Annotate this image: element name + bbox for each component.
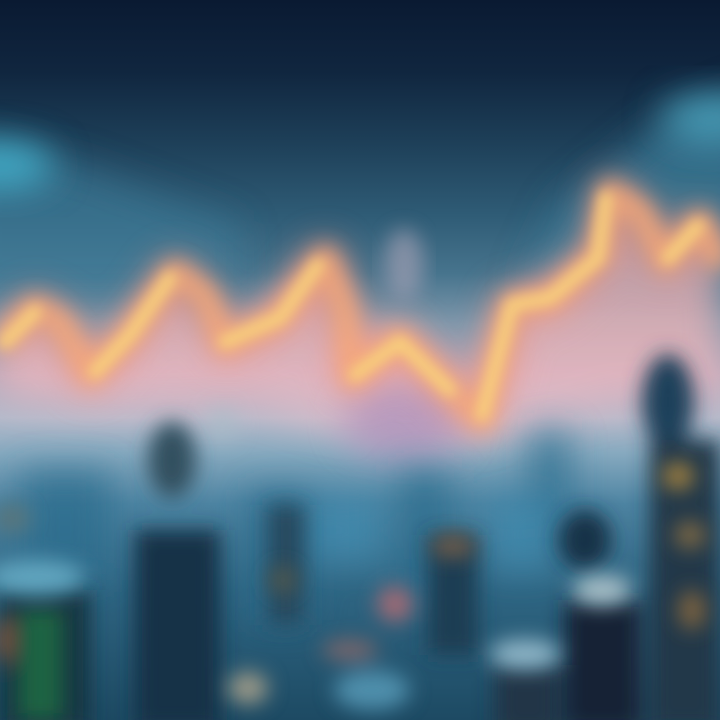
distant pale tower (384, 229, 424, 301)
market line: yellow rising segments (5, 198, 698, 415)
violet haze at the centre (343, 380, 467, 460)
market line glow (0, 192, 720, 420)
foreground dark buildings (0, 354, 720, 720)
hazy mid-ground buildings (20, 430, 570, 620)
rooftops and window lights (0, 407, 706, 720)
market line: orange body (0, 192, 720, 420)
pink haze under the line (0, 190, 720, 450)
light beams in the sky (0, 85, 720, 300)
left and right sky glow (0, 94, 720, 189)
